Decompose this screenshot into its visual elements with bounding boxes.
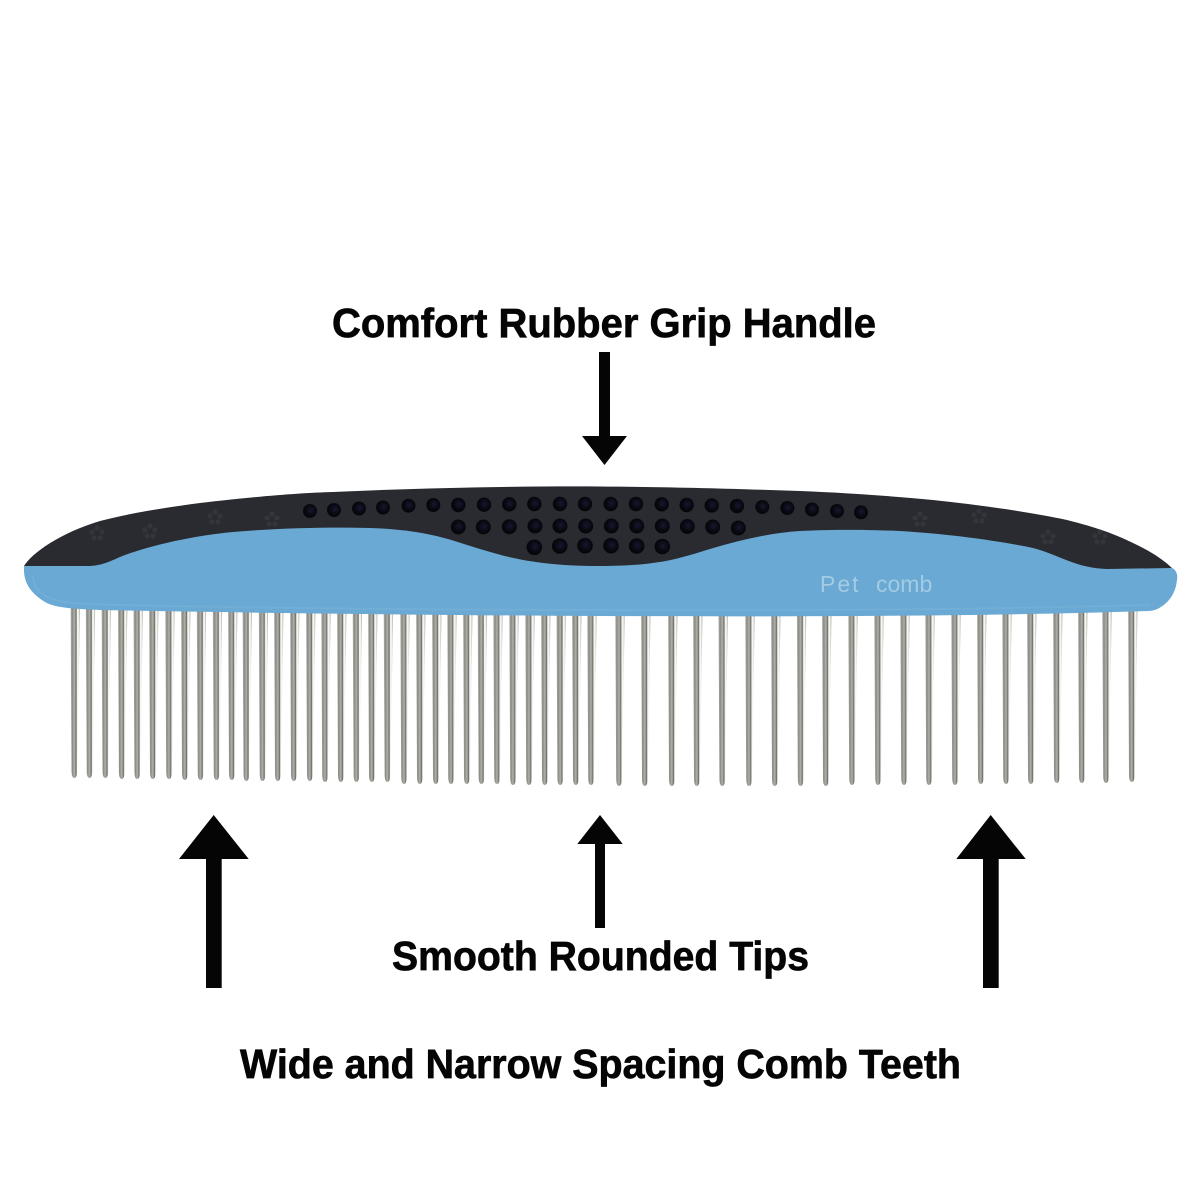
grip studs: [303, 497, 868, 555]
arrow: up to tips: [577, 815, 623, 928]
label: wide and narrow spacing: Wide and Narrow Spacing Comb Teeth: [240, 1041, 961, 1087]
handle blue body: [24, 528, 1177, 616]
arrow: down to handle: [582, 352, 627, 465]
comb teeth: [71, 604, 1138, 786]
title: comfort rubber grip handle: Comfort Rubber Grip Handle: [332, 300, 876, 346]
handle blue raised edge highlight: [33, 576, 1150, 610]
paw print marks: [89, 508, 1108, 545]
pet comb imprint: Pet: [820, 571, 861, 597]
label: smooth rounded tips: Smooth Rounded Tips: [392, 933, 809, 979]
handle black rubber grip: [24, 486, 1173, 585]
arrow: up to wide teeth: [956, 815, 1026, 988]
comb: [24, 486, 1177, 786]
arrow: up to narrow teeth: [179, 815, 249, 988]
pet comb imprint: comb: [876, 571, 932, 597]
